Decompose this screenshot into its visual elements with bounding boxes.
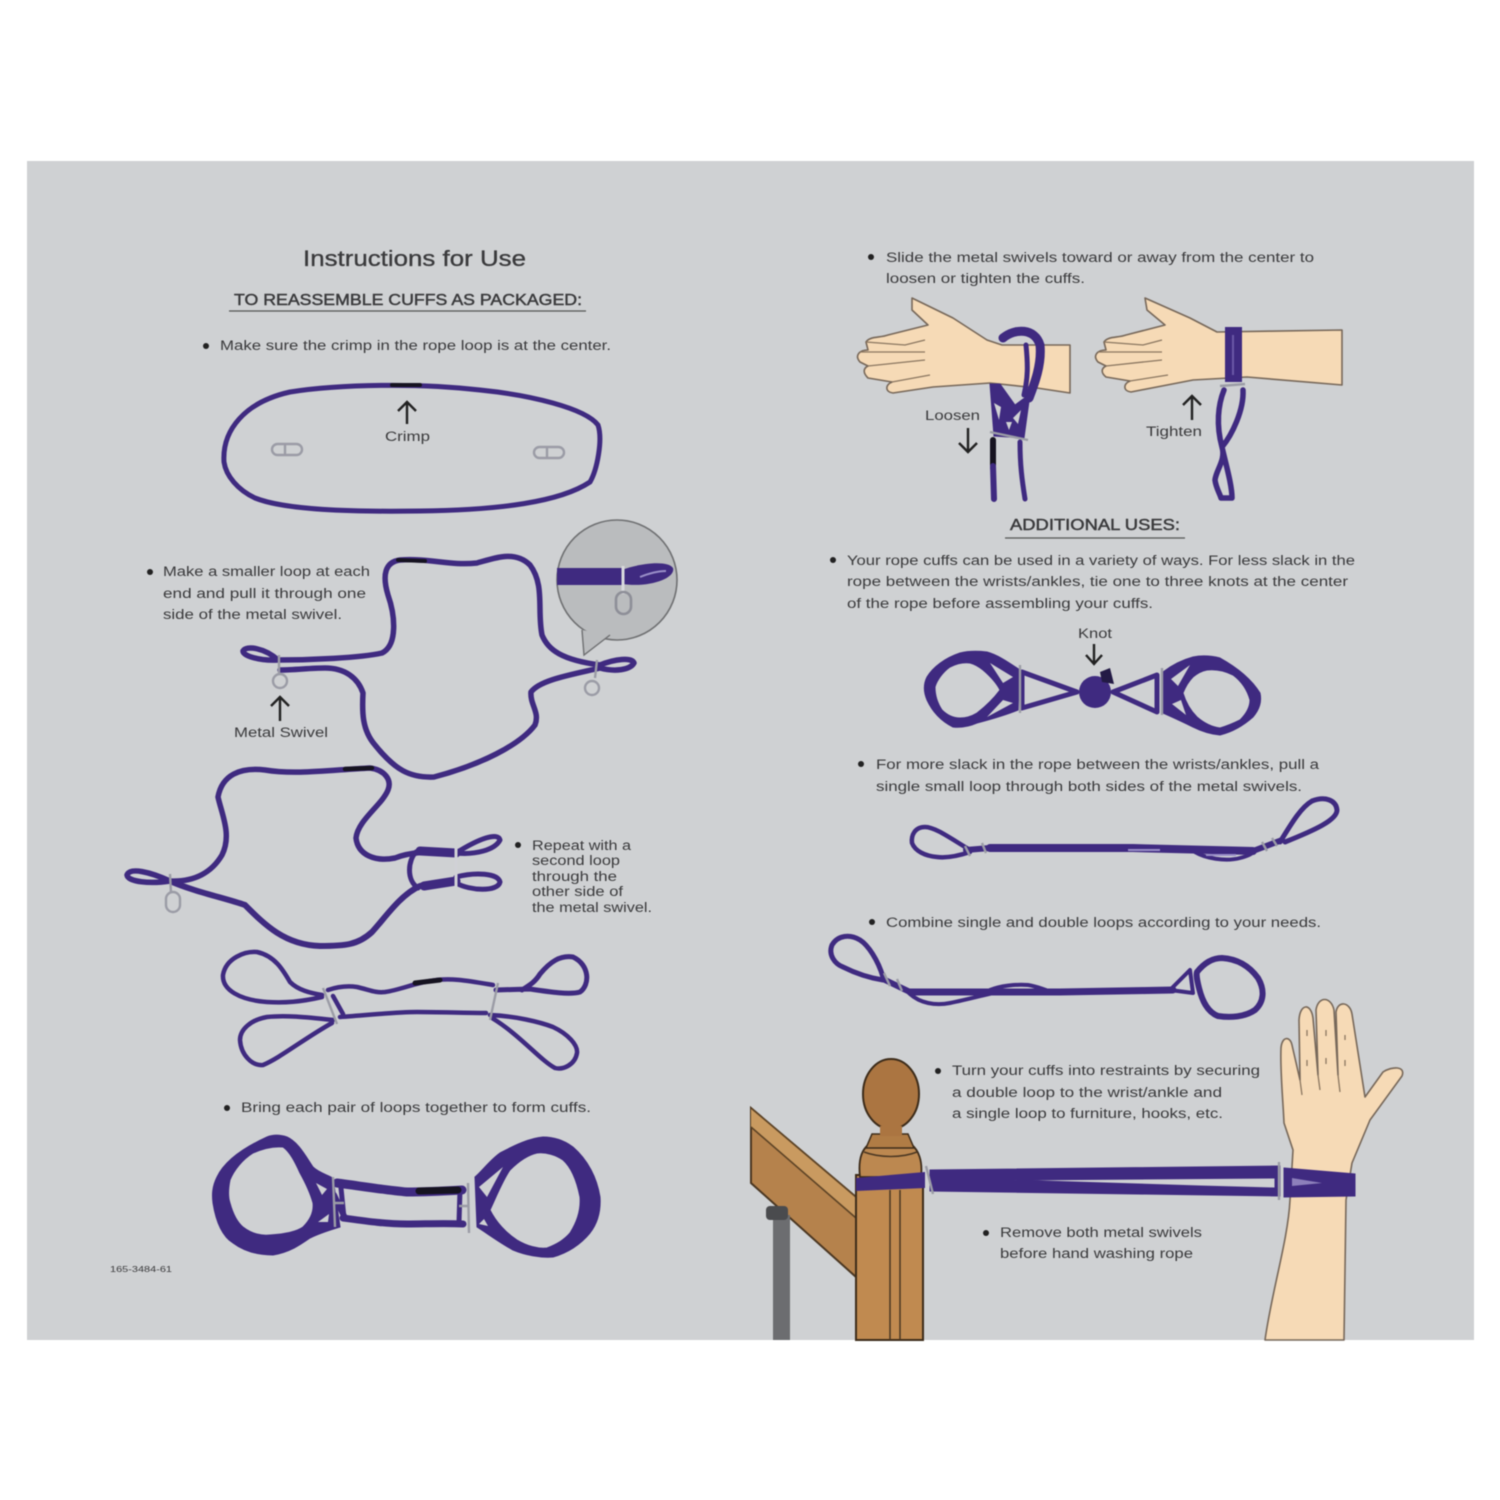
illustration: loosened hand: Loosen [925,408,980,423]
step: slide swivels text: loosen or tighten the cuffs. [886,271,1085,286]
step: knots text: rope between the wrists/ankles, tie one to three knots at the center [847,574,1349,589]
step: restraints text: a single loop to furniture, hooks, etc. [952,1106,1223,1121]
heading: reassemble cuffs: TO REASSEMBLE CUFFS AS PACKAGED: [234,292,582,309]
step: remove swivels text [983,1225,1202,1261]
metal swivel left [273,655,287,688]
step: restraints text: Turn your cuffs into restraints by securing [952,1063,1260,1078]
part number: 165-3484-61 [110,1265,173,1274]
step: slide swivels text [868,250,1314,286]
metal swivel [166,874,180,912]
metal swivel right [585,660,599,695]
step: repeat text: Repeat with a [532,838,632,853]
left cuff [212,1135,340,1255]
step: restraints text [935,1063,1260,1121]
figure: two swivels four loops [223,952,587,1068]
figure: cuffs with knot: Knot [1078,626,1112,641]
title: Instructions for Use [303,246,526,271]
illustration: tightened hand: Tighten [1146,424,1202,439]
step: combine text: Combine single and double loops according to your needs. [886,915,1321,930]
right loops [1163,656,1261,735]
step: knots text [830,553,1355,611]
step: smaller loop text: Make a smaller loop at each [163,564,370,579]
handrail [751,1108,856,1277]
step: repeat text: through the [532,869,617,884]
bow tie ropes [1022,672,1157,712]
figure: rope with one loop each end [234,556,634,777]
post [856,1059,923,1340]
step: restraints text: a double loop to the wrist/ankle and [952,1085,1222,1100]
figure: single and double loop rope [831,936,1263,1017]
knot [1079,676,1111,708]
illustration: raised hand and arm [1265,1000,1403,1340]
step: repeat text [515,838,652,915]
callout: swivel detail [557,520,677,655]
step: smaller loop text: side of the metal swivel. [163,607,342,622]
step: more slack text [858,757,1320,794]
step: knots text: Your rope cuffs can be used in a variety of ways. For less slack in the [847,553,1355,568]
figure: second loop through swivel [127,768,500,946]
step: slide swivels text: Slide the metal swivels toward or away from the center to [886,250,1314,265]
left loops [924,651,1020,727]
panel: grey background [27,161,1474,1340]
centre rope [337,1183,462,1192]
right cuff [475,1137,600,1257]
rope restraint between post and wrist [856,1162,1355,1200]
figure: rope with one loop each end: Metal Swivel [234,725,328,740]
figure: cuffs with knot [924,626,1261,735]
step: repeat text: other side of [532,884,623,899]
illustration: tightened hand [1096,298,1342,498]
heading: additional uses: ADDITIONAL USES: [1010,517,1180,534]
step: repeat text: the metal swivel. [532,900,652,915]
step: crimp text: Make sure the crimp in the rope loop is at the center. [220,338,611,353]
illustration: loosened hand [858,298,1070,499]
step: repeat text: second loop [532,853,620,868]
swivels [333,1177,469,1233]
figure: rope loop with crimp [224,385,600,511]
step: smaller loop text [147,564,370,622]
step: remove swivels text: before hand washing rope [1000,1246,1193,1261]
figure: single loops rope [912,799,1337,860]
illustration: stair railing post [751,1059,923,1340]
rope crossing [990,384,1030,438]
step: smaller loop text: end and pull it through one [163,586,366,601]
step: more slack text: single small loop through both sides of the metal swivels. [876,779,1302,794]
step: knots text: of the rope before assembling your cuffs. [847,596,1153,611]
figure: rope loop with crimp: Crimp [385,429,430,444]
step: bring loops text: Bring each pair of loops together to form cuffs. [241,1100,591,1115]
baluster [766,1206,790,1340]
step: more slack text: For more slack in the rope between the wrists/ankles, pull a [876,757,1320,772]
figure: assembled cuffs [212,1135,600,1257]
step: remove swivels text: Remove both metal swivels [1000,1225,1202,1240]
